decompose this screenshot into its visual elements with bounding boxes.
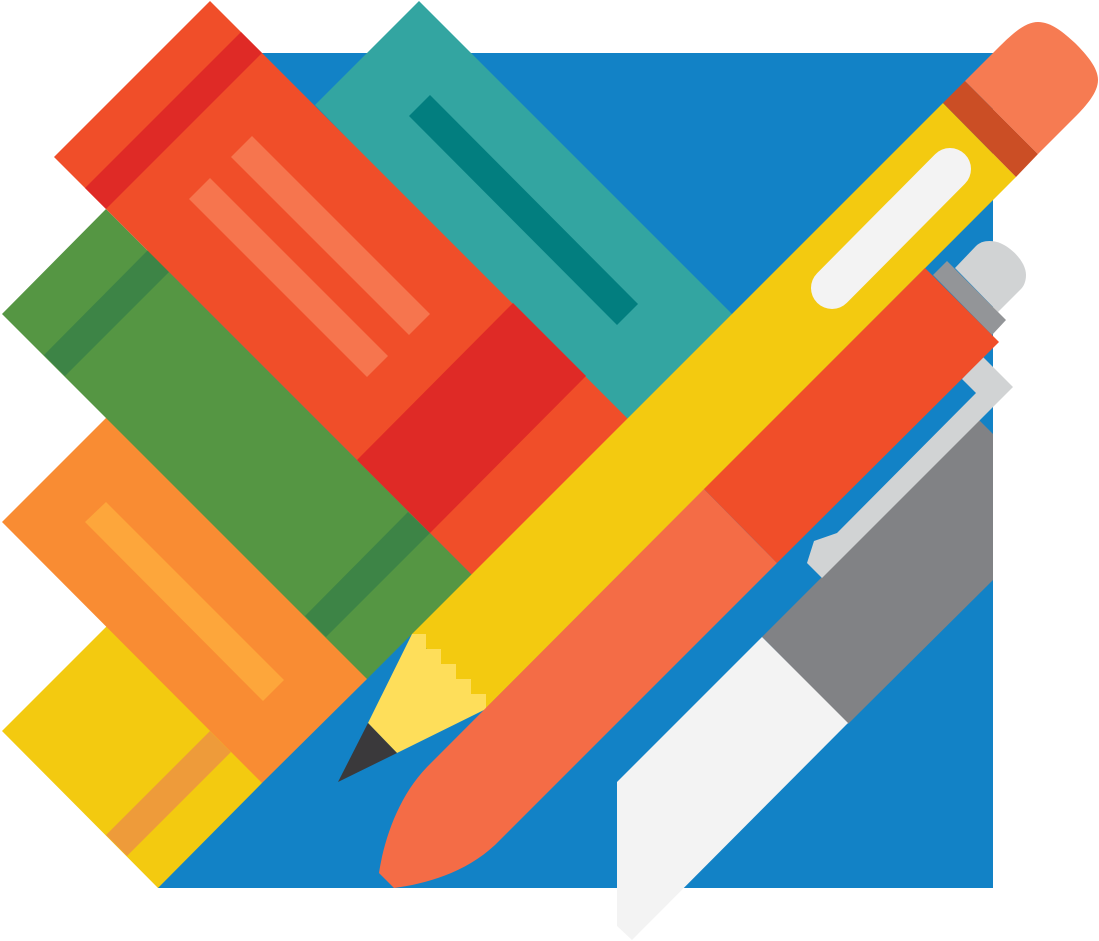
pencil highlight (832, 169, 950, 288)
book: teal (315, 1, 760, 446)
pen: grey ballpoint (617, 241, 1026, 940)
green book top band (44, 250, 169, 376)
pencil: yellow (338, 22, 1098, 782)
pencil ferrule (943, 81, 1038, 177)
pen push button (955, 241, 1026, 312)
pen barrel (762, 420, 993, 724)
marker: orange (379, 268, 999, 888)
red book label stripe lower (189, 178, 388, 377)
red book wide band (357, 303, 586, 533)
book: green (2, 209, 480, 679)
pencil eraser (965, 22, 1098, 154)
marker lower body (379, 485, 777, 888)
pencil body (412, 103, 1016, 709)
pencil lead (338, 723, 397, 782)
book: red (54, 1, 650, 598)
orange book label stripe (85, 502, 284, 701)
red book top band (85, 32, 262, 209)
pen tip (617, 637, 848, 940)
book: orange (2, 418, 367, 783)
pen collar (933, 261, 1006, 335)
pen clip (807, 357, 1013, 578)
red book label stripe upper (231, 136, 430, 335)
panel: blue background square (158, 53, 993, 888)
book: yellow (2, 610, 262, 888)
pencil sharpened wood (368, 634, 486, 753)
marker upper body (704, 268, 999, 563)
teal book label stripe (409, 95, 638, 325)
green book bottom band (305, 512, 430, 637)
yellow book spine band (106, 731, 231, 856)
